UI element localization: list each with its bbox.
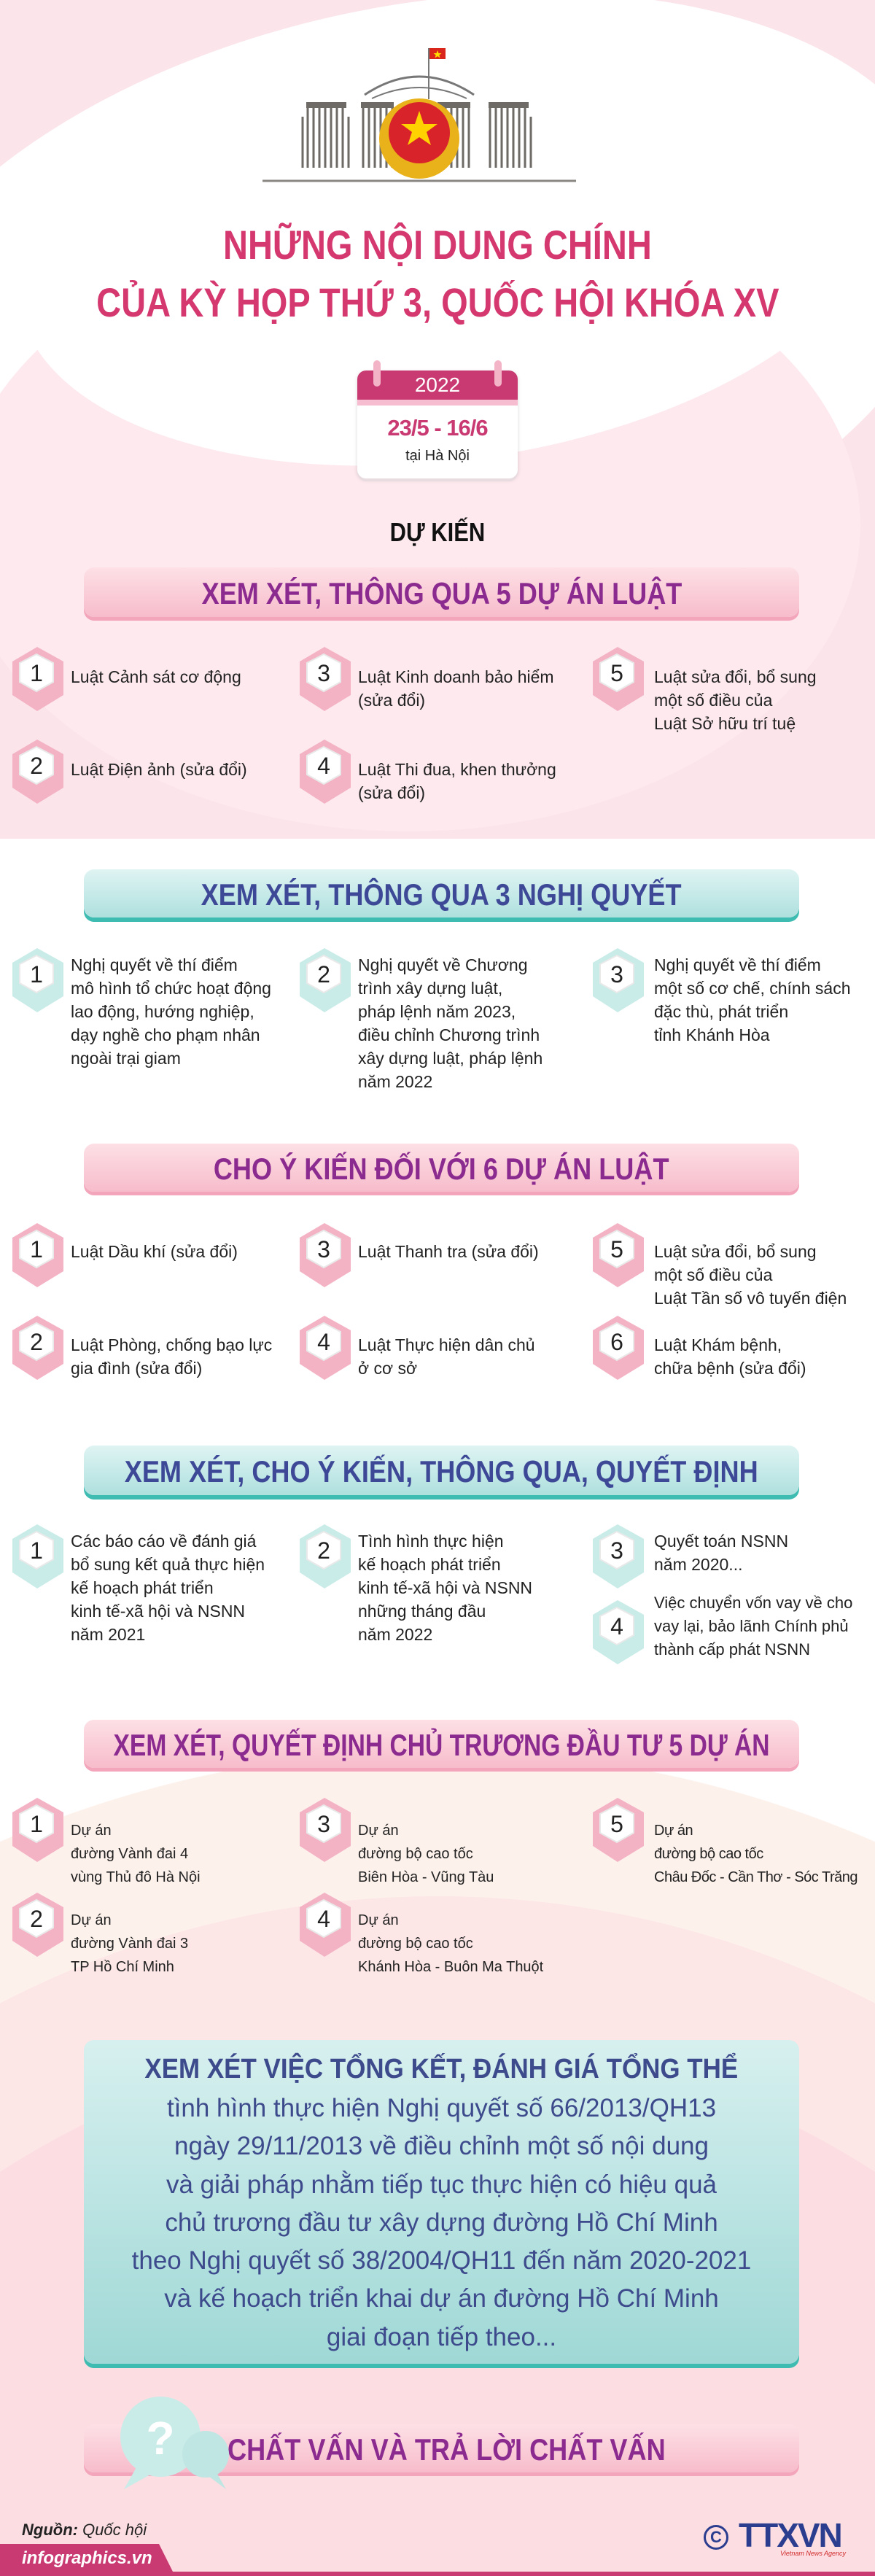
panel: 5 investment projects: Khánh Hòa - Buôn Ma Thuột xyxy=(358,1959,543,1975)
item 3: 3 xyxy=(317,660,330,686)
icon: national assembly building with emblem xyxy=(262,48,576,182)
item 1: lao động, hướng nghiệp, xyxy=(71,1002,254,1021)
item 6: 6 xyxy=(610,1329,623,1355)
item 2: kinh tế-xã hội và NSNN xyxy=(358,1578,532,1597)
title xyxy=(96,222,779,325)
item 1: 1 xyxy=(30,1811,43,1837)
item 5: Luật sửa đổi, bổ sung xyxy=(654,1242,817,1261)
box body text: tình hình thực hiện Nghị quyết số 66/2013/QH13 xyxy=(167,2094,716,2122)
source note: Nguồn: Quốc hội xyxy=(22,2521,147,2539)
item 1: đường Vành đai 4 xyxy=(71,1846,188,1862)
item 4: (sửa đổi) xyxy=(358,783,425,802)
section header: questioning: CHẤT VẤN VÀ TRẢ LỜI CHẤT VẤN xyxy=(228,2432,666,2467)
footer: infographics.vn bar xyxy=(0,2544,875,2576)
item 3 xyxy=(593,948,850,1044)
panel: 3 resolutions xyxy=(12,948,850,1091)
box title: XEM XÉT VIỆC TỔNG KẾT, ĐÁNH GIÁ TỔNG THỂ xyxy=(145,2054,738,2084)
panel: reports and budget: kinh tế-xã hội và NSNN xyxy=(71,1602,245,1621)
item 5: Luật sửa đổi, bổ sung xyxy=(654,667,817,686)
item 4: Việc chuyển vốn vay về cho xyxy=(654,1594,852,1612)
calendar: date and place: tại Hà Nội xyxy=(405,448,470,464)
box body text: chủ trương đầu tư xây dựng đường Hồ Chí Minh xyxy=(165,2208,718,2237)
item 2: trình xây dựng luật, xyxy=(358,979,502,998)
item 3: Luật Kinh doanh bảo hiểm xyxy=(358,667,554,686)
item 5 xyxy=(593,647,817,733)
item 2: kế hoạch phát triển xyxy=(358,1555,501,1574)
item 1: Nghị quyết về thí điểm xyxy=(71,955,238,974)
panel: 6 law projects xyxy=(12,1223,847,1380)
item 4 xyxy=(300,1893,544,1975)
item 3: Dự án xyxy=(358,1823,399,1839)
item 2: Luật Phòng, chống bạo lực xyxy=(71,1335,272,1354)
item 5: 5 xyxy=(610,1236,623,1262)
calendar: date and place: 2022 xyxy=(415,373,460,396)
footer: infographics.vn bar: infographics.vn xyxy=(22,2548,152,2568)
panel: 5 law projects xyxy=(12,647,817,804)
item 4 xyxy=(593,1594,852,1664)
item 2: 2 xyxy=(30,753,43,779)
panel: 5 investment projects: Biên Hòa - Vũng Tàu xyxy=(358,1869,494,1885)
box body text: và kế hoạch triển khai dự án đường Hồ Chí Minh xyxy=(164,2284,719,2313)
item 1 xyxy=(12,1223,238,1287)
logo: TTXVN: Vietnam News Agency xyxy=(780,2550,846,2557)
item 2: 2 xyxy=(30,1906,43,1932)
panel: 3 resolutions: ngoài trại giam xyxy=(71,1049,181,1068)
heading: dự kiến: DỰ KIẾN xyxy=(390,517,485,547)
item 2 xyxy=(12,1893,188,1975)
section header: questioning xyxy=(84,2424,799,2472)
item 3: 3 xyxy=(317,1811,330,1837)
item 1 xyxy=(12,1524,265,1644)
item 1: 1 xyxy=(30,660,43,686)
panel: 3 resolutions: tỉnh Khánh Hòa xyxy=(654,1025,770,1044)
panel: reports and budget: những tháng đầu xyxy=(358,1602,486,1621)
item 4: thành cấp phát NSNN xyxy=(654,1640,810,1659)
item 1 xyxy=(12,1798,201,1885)
item 2: 2 xyxy=(317,961,330,988)
panel: reports and budget: năm 2021 xyxy=(71,1625,145,1644)
item 1: 1 xyxy=(30,1236,43,1262)
item 4: ở cơ sở xyxy=(358,1359,417,1378)
item 6: chữa bệnh (sửa đổi) xyxy=(654,1359,806,1378)
item 4: vay lại, bảo lãnh Chính phủ xyxy=(654,1617,849,1635)
item 2: 2 xyxy=(317,1537,330,1564)
item 5: đường bộ cao tốc xyxy=(654,1846,763,1862)
panel: 3 resolutions: xây dựng luật, pháp lệnh xyxy=(358,1049,542,1068)
item 2: Nghị quyết về Chương xyxy=(358,955,528,974)
item 3: 3 xyxy=(610,1537,623,1564)
item 4: 4 xyxy=(317,1906,330,1932)
section header: 3 resolutions xyxy=(84,869,799,917)
box body text: theo Nghị quyết số 38/2004/QH11 đến năm 2020-2021 xyxy=(132,2246,751,2275)
panel: 6 law projects: Luật Tần số vô tuyến điện xyxy=(654,1289,847,1308)
section header: 5 investment projects: XEM XÉT, QUYẾT ĐỊNH CHỦ TRƯƠNG ĐẦU TƯ 5 DỰ ÁN xyxy=(113,1728,770,1762)
panel: reports and budget xyxy=(12,1524,852,1664)
item 2 xyxy=(12,1316,272,1380)
box body text xyxy=(132,2094,751,2351)
title: CỦA KỲ HỌP THỨ 3, QUỐC HỘI KHÓA XV xyxy=(96,279,779,325)
item 6 xyxy=(593,1316,806,1380)
section header: 5 law projects: XEM XÉT, THÔNG QUA 5 DỰ ÁN LUẬT xyxy=(201,576,682,610)
title: NHỮNG NỘI DUNG CHÍNH xyxy=(223,222,652,268)
item 1: Luật Dầu khí (sửa đổi) xyxy=(71,1242,238,1261)
item 4: 4 xyxy=(610,1613,623,1640)
section header: 6 law projects for comment: CHO Ý KIẾN ĐỐI VỚI 6 DỰ ÁN LUẬT xyxy=(214,1152,669,1186)
item 2: Dự án xyxy=(71,1912,112,1928)
panel: 5 investment projects: Châu Đốc - Cần Thơ - Sóc Trăng xyxy=(654,1869,858,1885)
icon: question speech bubble xyxy=(120,2397,229,2489)
panel: 3 resolutions: điều chỉnh Chương trình xyxy=(358,1025,540,1044)
item 4: Dự án xyxy=(358,1912,399,1928)
item 3 xyxy=(300,1223,539,1287)
item 2: 2 xyxy=(30,1329,43,1355)
icon: question speech bubble: ? xyxy=(146,2412,175,2464)
panel: 3 resolutions: dạy nghề cho phạm nhân xyxy=(71,1025,260,1044)
panel: 5 investment projects xyxy=(12,1798,858,1975)
item 5 xyxy=(593,1223,847,1308)
item 5 xyxy=(593,1798,858,1885)
item 5: 5 xyxy=(610,660,623,686)
item 2 xyxy=(300,948,542,1091)
section header: review, comment, approve, decide: XEM XÉT, CHO Ý KIẾN, THÔNG QUA, QUYẾT ĐỊNH xyxy=(125,1454,758,1489)
item 1: Luật Cảnh sát cơ động xyxy=(71,667,241,686)
panel: 3 resolutions: năm 2022 xyxy=(358,1072,432,1091)
item 1: Các báo cáo về đánh giá xyxy=(71,1532,256,1551)
item 3 xyxy=(300,1798,494,1885)
item 3: 3 xyxy=(610,961,623,988)
logo: TTXVN: C xyxy=(710,2528,722,2546)
box body text: và giải pháp nhằm tiếp tục thực hiện có hiệu quả xyxy=(166,2170,717,2199)
panel: 5 law projects: Luật Sở hữu trí tuệ xyxy=(654,714,796,733)
item 4: 4 xyxy=(317,753,330,779)
item 6: Luật Khám bệnh, xyxy=(654,1335,782,1354)
item 5: 5 xyxy=(610,1811,623,1837)
logo: TTXVN xyxy=(704,2516,846,2557)
panel: 5 investment projects: vùng Thủ đô Hà Nội xyxy=(71,1869,201,1885)
item 3: năm 2020... xyxy=(654,1555,742,1574)
panel: Ho Chi Minh road review xyxy=(84,2040,799,2364)
item 2: pháp lệnh năm 2023, xyxy=(358,1002,516,1021)
box body text: ngày 29/11/2013 về điều chỉnh một số nội dung xyxy=(174,2132,709,2160)
item 1: 1 xyxy=(30,961,43,988)
item 4: đường bộ cao tốc xyxy=(358,1936,473,1952)
item 3: Quyết toán NSNN xyxy=(654,1532,788,1551)
section header: 5 investment projects xyxy=(84,1720,799,1768)
calendar: date and place xyxy=(356,360,519,481)
item 4 xyxy=(300,1316,535,1380)
item 1 xyxy=(12,948,271,1068)
item 2: đường Vành đai 3 xyxy=(71,1936,188,1952)
item 3: 3 xyxy=(317,1236,330,1262)
item 1: bổ sung kết quả thực hiện xyxy=(71,1555,265,1574)
item 3: Luật Thanh tra (sửa đổi) xyxy=(358,1242,539,1261)
panel: 5 investment projects: TP Hồ Chí Minh xyxy=(71,1959,174,1975)
item 1: 1 xyxy=(30,1537,43,1564)
item 3: một số cơ chế, chính sách xyxy=(654,979,850,998)
item 2 xyxy=(12,740,247,804)
item 3 xyxy=(300,647,554,711)
box body text: giai đoạn tiếp theo... xyxy=(327,2323,556,2351)
item 4: Luật Thi đua, khen thưởng xyxy=(358,760,556,779)
logo: TTXVN: TTXVN xyxy=(739,2516,841,2554)
item 1: mô hình tổ chức hoạt động xyxy=(71,979,271,998)
item 3: (sửa đổi) xyxy=(358,691,425,710)
section header: 6 law projects for comment xyxy=(84,1144,799,1192)
item 5: một số điều của xyxy=(654,691,772,710)
panel: reports and budget: năm 2022 xyxy=(358,1625,432,1644)
item 3 xyxy=(593,1524,788,1588)
section header: review, comment, approve, decide xyxy=(84,1446,799,1495)
item 2: gia đình (sửa đổi) xyxy=(71,1359,202,1378)
section header: 3 resolutions: XEM XÉT, THÔNG QUA 3 NGHỊ QUYẾT xyxy=(201,877,682,912)
item 5: Dự án xyxy=(654,1823,693,1839)
item 4: Luật Thực hiện dân chủ xyxy=(358,1335,535,1354)
item 1: Dự án xyxy=(71,1823,112,1839)
item 2: Luật Điện ảnh (sửa đổi) xyxy=(71,760,247,779)
item 3: đặc thù, phát triển xyxy=(654,1002,788,1021)
item 2: Tình hình thực hiện xyxy=(358,1532,504,1551)
item 4: 4 xyxy=(317,1329,330,1355)
item 1: kế hoạch phát triển xyxy=(71,1578,214,1597)
item 5: một số điều của xyxy=(654,1265,772,1284)
item 4 xyxy=(300,740,556,804)
item 2 xyxy=(300,1524,532,1644)
item 3: Nghị quyết về thí điểm xyxy=(654,955,821,974)
item 1 xyxy=(12,647,241,711)
item 3: đường bộ cao tốc xyxy=(358,1846,473,1862)
section header: 5 law projects xyxy=(84,567,799,617)
calendar: date and place: 23/5 - 16/6 xyxy=(387,415,488,441)
